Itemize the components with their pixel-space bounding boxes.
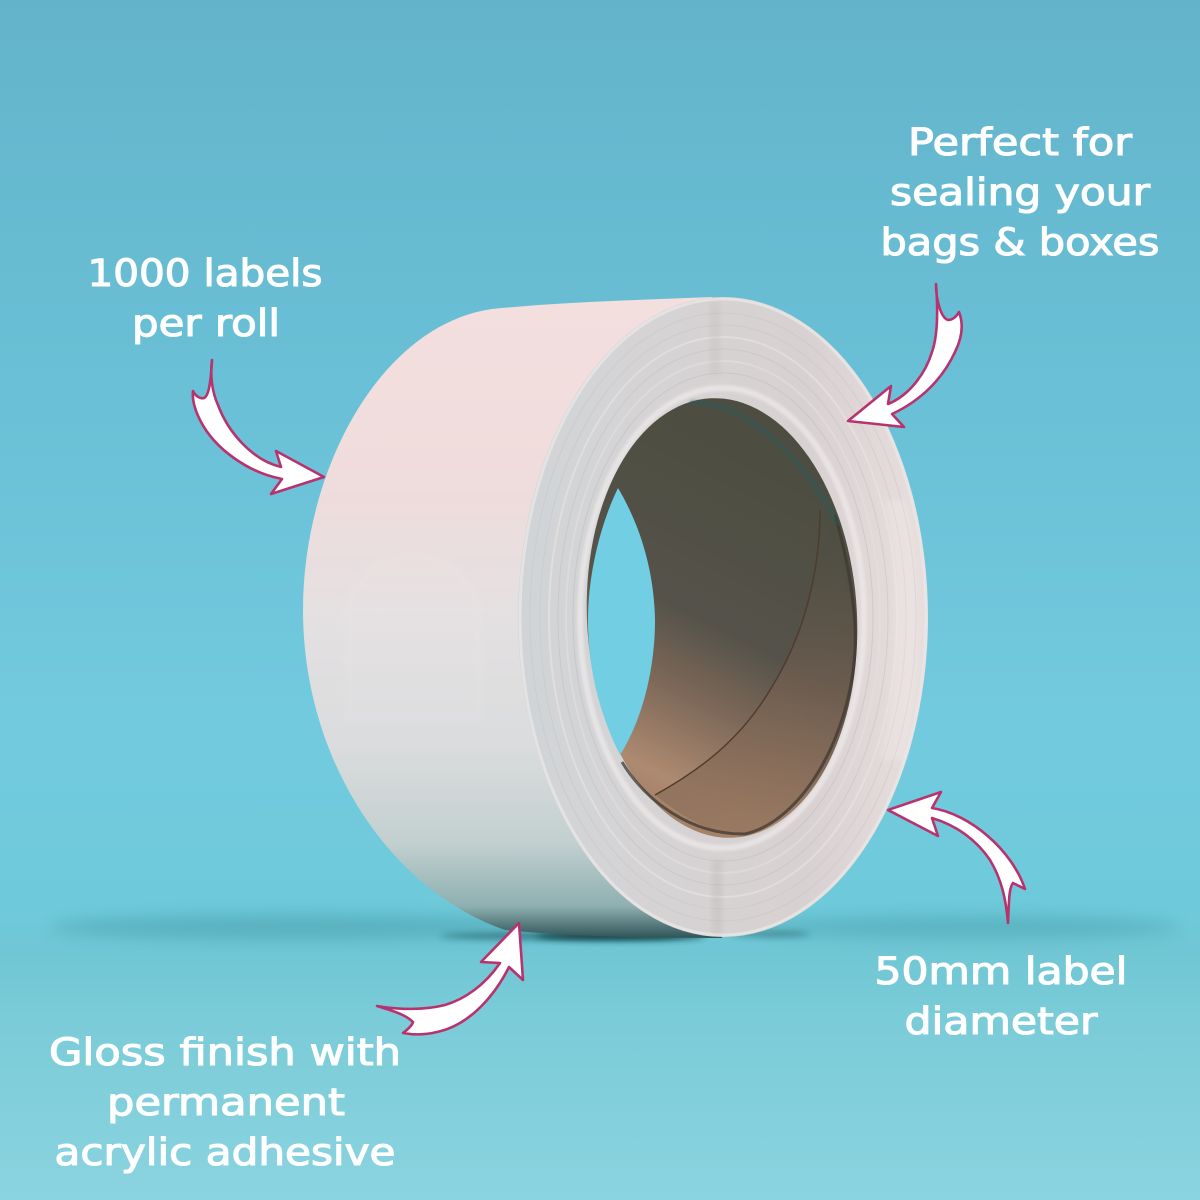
text: gloss finish: Gloss finish with	[49, 1031, 401, 1074]
text: 50mm label diameter	[874, 950, 1128, 1043]
text: perfect for sealing: bags & boxes	[880, 221, 1160, 264]
arrow: sealing bags and boxes	[848, 284, 962, 427]
core seam line	[655, 510, 820, 795]
text: 1000 labels per roll	[88, 252, 322, 345]
text: 1000 labels per roll: 1000 labels	[88, 252, 322, 295]
faint label outline	[345, 551, 484, 720]
arrow: label diameter	[888, 792, 1025, 923]
text: perfect for sealing: sealing your	[890, 171, 1151, 214]
text: 50mm label diameter: 50mm label	[874, 950, 1128, 993]
label roll	[303, 297, 928, 938]
text: 50mm label diameter: diameter	[904, 1000, 1098, 1043]
face winding rings	[520, 299, 926, 935]
top seam streak	[710, 302, 720, 376]
right face highlight	[880, 500, 918, 760]
arrow: labels per roll	[193, 360, 324, 494]
arrow: gloss finish	[377, 923, 523, 1034]
bottom seam streak	[712, 860, 722, 934]
core right section	[655, 510, 855, 834]
text: 1000 labels per roll: per roll	[132, 302, 280, 345]
core upper edge shade	[690, 403, 838, 525]
text: perfect for sealing	[880, 121, 1160, 264]
text: gloss finish: acrylic adhesive	[54, 1131, 396, 1174]
text: gloss finish: permanent	[107, 1081, 345, 1124]
roll outer side	[303, 297, 722, 938]
ground shadow	[50, 914, 1180, 940]
text: gloss finish	[49, 1031, 401, 1174]
see-through opening	[588, 488, 655, 755]
text: perfect for sealing: Perfect for	[908, 121, 1133, 164]
core hole	[576, 391, 868, 845]
core lower rim	[622, 515, 855, 834]
roll front face	[518, 297, 928, 937]
